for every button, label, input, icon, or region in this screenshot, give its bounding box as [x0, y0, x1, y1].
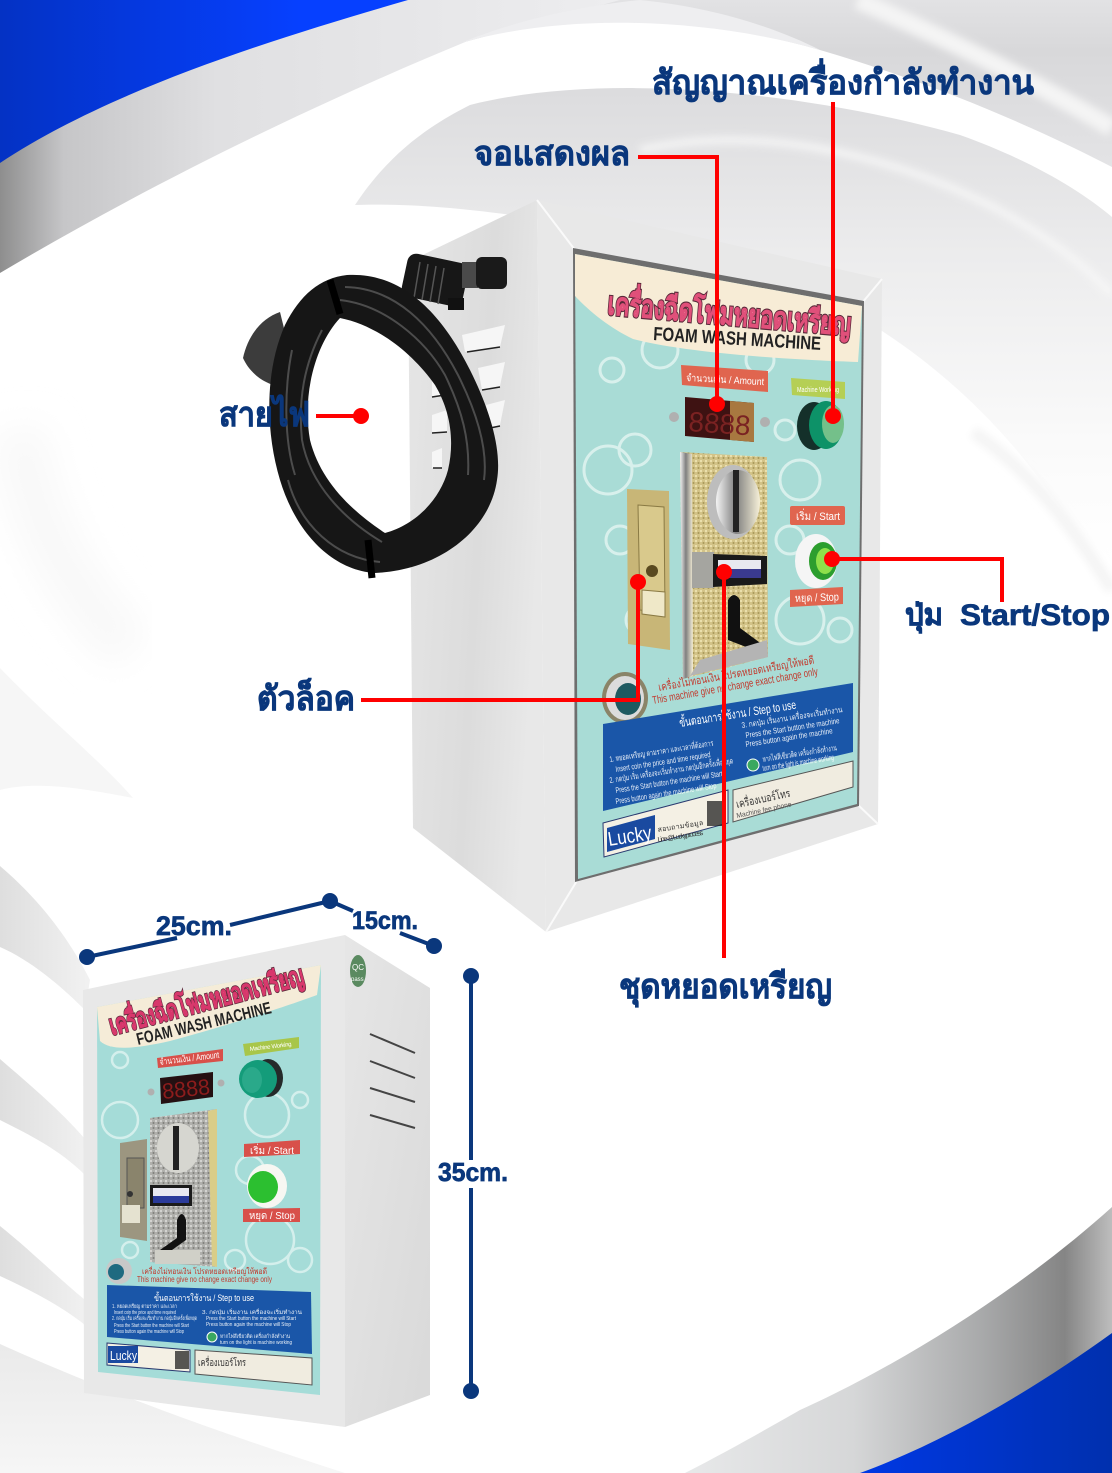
cable ring [269, 275, 498, 573]
small instructions panel: 3. กดปุ่ม เริ่มงาน เครื่องจะเริ่มทำงาน [202, 1308, 302, 1316]
phone number box: เครื่องเบอร์โทร [735, 785, 791, 811]
small title english: FOAM WASH MACHINE [135, 998, 273, 1049]
panel title thai: เครื่องฉีดโฟมหยอดเหรียญ [606, 281, 853, 343]
machine working tag: Machine Working [797, 387, 839, 394]
callout: display: จอแสดงผล [474, 135, 630, 173]
small title thai [105, 956, 307, 1042]
warning text [651, 652, 819, 707]
small instructions panel: Press button again the machine will Stop [114, 1329, 184, 1335]
small instructions panel: Insert coin the price and time required [114, 1310, 176, 1316]
machine side wall [408, 200, 546, 932]
instructions panel [603, 683, 853, 811]
instructions panel: 2. กดปุ่ม เริ่ม เครื่องจะเริ่มทำงาน กดปุ่มอีกครั้งเพื่อหยุด [609, 755, 734, 785]
digital display [669, 397, 770, 442]
warning text: This machine give no change exact change only [651, 666, 819, 707]
dimension: height 35cm [438, 968, 508, 1399]
small phone box: เครื่องเบอร์โทร [198, 1355, 246, 1369]
instructions panel: Press the Start button the machine [745, 716, 841, 740]
instructions panel: Press button again the machine will Stop [615, 781, 717, 806]
instructions panel: 3. กดปุ่ม เริ่มงาน เครื่องจะเริ่มทำงาน [741, 703, 843, 730]
corner: bottom-right grey swoosh [685, 1207, 1112, 1473]
amount tag: จำนวนเงิน / Amount [686, 373, 765, 388]
dimension: depth 15cm [330, 901, 442, 954]
instructions panel: Press button again the machine [745, 726, 834, 749]
bubbles [584, 332, 852, 644]
green indicator lamp [797, 401, 844, 450]
phone number box [733, 761, 853, 822]
callout: start stop button: Start/Stop [960, 599, 1110, 632]
small instructions panel [107, 1285, 312, 1354]
instructions panel: ขั้นตอนการใช้งาน / Step to use [678, 696, 797, 730]
qc pass badge [350, 955, 366, 987]
digital display: 8888 [688, 406, 752, 441]
start tag: เริ่ม / Start [796, 508, 840, 523]
panel title thai [606, 281, 853, 343]
power cable coil [243, 252, 507, 578]
panel face [575, 254, 862, 879]
small panel [97, 965, 321, 1395]
key lock [602, 672, 648, 724]
small instructions panel: 2. กดปุ่ม เริ่ม เครื่องจะเริ่มทำงาน กดปุ่มอีกครั้งเพื่อหยุด [112, 1314, 197, 1322]
small display [148, 1072, 224, 1104]
small working tag [243, 1037, 299, 1056]
dimension: width 25cm: 25cm. [156, 911, 232, 941]
small latch [120, 1139, 147, 1241]
qc pass badge: pass [351, 977, 364, 983]
small warning text: This machine give no change exact change only [137, 1275, 272, 1284]
small instructions panel: Press button again the machine will Stop [206, 1322, 291, 1328]
small start tag [244, 1140, 300, 1157]
warning text: เครื่องไม่ทอนเงิน โปรดหยอดเหรียญให้พอดี [657, 652, 815, 694]
dimension: width 25cm [79, 893, 338, 965]
small lucky box: Lucky [110, 1348, 137, 1363]
small title thai: เครื่องฉีดโฟมหยอดเหรียญ [105, 956, 307, 1042]
instructions panel: turn on the light is machine working [762, 753, 834, 773]
lucky contact box: Line @Luckyprocess [657, 830, 704, 844]
small display: 8888 [161, 1074, 211, 1104]
panel title thai: เครื่องฉีดโฟมหยอดเหรียญ [606, 281, 853, 343]
small machine vents [370, 1034, 415, 1128]
small title thai: เครื่องฉีดโฟมหยอดเหรียญ [105, 956, 307, 1042]
panel title english: FOAM WASH MACHINE [653, 324, 822, 355]
callout: power cable: สายไฟ [219, 394, 310, 434]
small key lock [106, 1258, 132, 1284]
small instructions panel: หากไฟสีเขียวติด เครื่องกำลังทำงาน [220, 1332, 290, 1340]
qc pass badge: QC [352, 963, 364, 972]
phone number box: Machine fee phone [736, 801, 792, 820]
callout: power cable [219, 394, 369, 434]
small machine with dimensions [83, 935, 430, 1427]
machine front frame [537, 200, 882, 932]
machine working tag [791, 378, 845, 399]
side vents [432, 325, 505, 468]
small stop tag: หยุด / Stop [249, 1211, 295, 1222]
callout: lock: ตัวล็อค [257, 677, 355, 718]
instructions panel: หากไฟสีเขียวติด เครื่องกำลังทำงาน [762, 741, 838, 764]
small amount tag [157, 1049, 223, 1068]
instructions panel: Press the Start button the machine will Start [615, 769, 724, 795]
small machine side [345, 935, 430, 1427]
small warning text [137, 1265, 272, 1284]
small green lamp [239, 1059, 283, 1098]
callout: coin unit [619, 564, 832, 1008]
instructions panel: Insert coin the price and time required [615, 750, 711, 774]
small title band [97, 965, 321, 1048]
small instructions panel: Press the Start button the machine will Start [114, 1323, 189, 1329]
small phone box [195, 1350, 312, 1385]
lucky contact box [603, 790, 728, 857]
corner: bottom-right blue swoosh [860, 1333, 1112, 1473]
small instructions panel: turn on the light is machine working [220, 1340, 292, 1346]
callout: display [474, 135, 725, 412]
callout: lock [257, 574, 646, 718]
small start button [247, 1164, 287, 1208]
callout: start stop button: ปุ่ม [905, 599, 943, 634]
cable highlights [286, 287, 485, 562]
small working tag: Machine Working [250, 1042, 292, 1053]
small instructions panel: ขั้นตอนการใช้งาน / Step to use [154, 1291, 254, 1303]
small instructions panel: Press the Start button the machine will Start [206, 1316, 296, 1322]
callout: machine working signal: สัญญาณเครื่องกำลังทำงาน [652, 58, 1034, 103]
power plug [243, 312, 298, 387]
dimension: depth 15cm: 15cm. [352, 907, 418, 935]
start tag [790, 506, 845, 525]
start stop button [795, 534, 837, 588]
callout: coin unit: ชุดหยอดเหรียญ [619, 968, 832, 1008]
corner: top-left blue swoosh [0, 0, 408, 163]
small coin mechanism [150, 1109, 217, 1267]
instructions panel: 1. หยอดเหรียญ ตามราคา และเวลาที่ต้องการ [609, 737, 714, 764]
stop tag: หยุด / Stop [795, 591, 839, 605]
small start tag: เริ่ม / Start [250, 1143, 294, 1157]
large machine [408, 200, 882, 932]
latch handle [627, 489, 670, 650]
small machine front [83, 935, 345, 1427]
small warning text: เครื่องไม่ทอนเงิน โปรดหยอดเหรียญให้พอดี [142, 1265, 267, 1276]
small bubbles [102, 1052, 312, 1272]
stop tag [790, 587, 843, 607]
cable gland connectors [400, 252, 507, 310]
coin mechanism [680, 452, 768, 679]
callout: start stop button [824, 551, 1110, 634]
panel title band [575, 254, 862, 362]
small instructions panel: 1. หยอดเหรียญ ตามราคา และเวลา [112, 1303, 177, 1310]
lucky contact box: สอบถามข้อมูล [657, 819, 704, 834]
callout: machine working signal [652, 58, 1034, 424]
amount tag [681, 365, 768, 392]
small stop tag [243, 1208, 300, 1222]
small amount tag: จำนวนเงิน / Amount [159, 1050, 220, 1067]
lucky contact box: Lucky [606, 822, 653, 851]
dimension: height 35cm: 35cm. [438, 1157, 508, 1187]
small lucky box [107, 1343, 190, 1372]
